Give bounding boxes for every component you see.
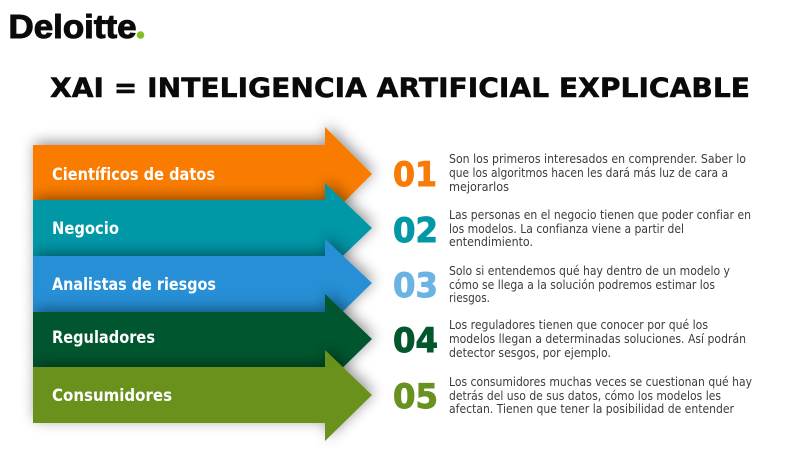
item 04 text: modelos llegan a determinadas soluciones. Así podrán — [449, 332, 746, 346]
item 05 text — [449, 375, 752, 416]
item 04 text: detector sesgos, por ejemplo. — [449, 346, 611, 360]
item 02 text: Las personas en el negocio tienen que poder confiar en — [449, 208, 751, 222]
item 05 text: afectan. Tienen que tener la posibilidad de entender — [449, 402, 735, 416]
item 01 text: Son los primeros interesados en comprender. Saber lo — [449, 152, 746, 166]
item 02 text: los modelos. La confianza viene a partir del — [449, 222, 684, 236]
arrow: Científicos de datos — [33, 127, 372, 221]
item 04 text: Los reguladores tienen que conocer por qué los — [449, 318, 708, 332]
item 01 text — [449, 152, 746, 194]
arrow: Analistas de riesgos: Analistas de riesgos — [52, 275, 216, 294]
title: XAI = INTELIGENCIA ARTIFICIAL EXPLICABLE — [50, 73, 750, 104]
item 05 number: 05 — [393, 377, 438, 417]
arrow: Reguladores — [33, 294, 372, 385]
item 03 number: 03 — [393, 266, 438, 306]
item 01 text: mejorarlos — [449, 180, 509, 194]
item 05 text: Los consumidores muchas veces se cuestionan qué hay — [449, 375, 752, 389]
arrow: Consumidores — [33, 350, 372, 441]
logo: Deloitte: Deloitte — [8, 8, 136, 45]
item 02 text: entendimiento. — [449, 235, 533, 249]
arrow: Negocio: Negocio — [52, 219, 119, 238]
item 03 text: Solo si entendemos qué hay dentro de un modelo y — [449, 264, 730, 278]
item 05 text: detrás del uso de sus datos, cómo los modelos les — [449, 389, 721, 403]
item 03 text — [449, 264, 730, 305]
item 01 text: que los algoritmos hacen les dará más luz de cara a — [449, 166, 728, 180]
arrow: Consumidores: Consumidores — [52, 386, 172, 405]
item 03 text: cómo se llega a la solución podremos estimar los — [449, 278, 715, 292]
item 03 text: riesgos. — [449, 291, 490, 305]
item 01 number: 01 — [393, 155, 437, 195]
arrow: Analistas de riesgos — [33, 239, 372, 329]
item 04 text — [449, 318, 746, 360]
item 02 text — [449, 208, 751, 249]
item 02 number: 02 — [393, 211, 438, 251]
arrow: Negocio — [33, 183, 372, 273]
arrow: Científicos de datos: Científicos de datos — [52, 165, 215, 184]
item 04 number: 04 — [393, 321, 438, 361]
arrow: Reguladores: Reguladores — [52, 328, 155, 347]
